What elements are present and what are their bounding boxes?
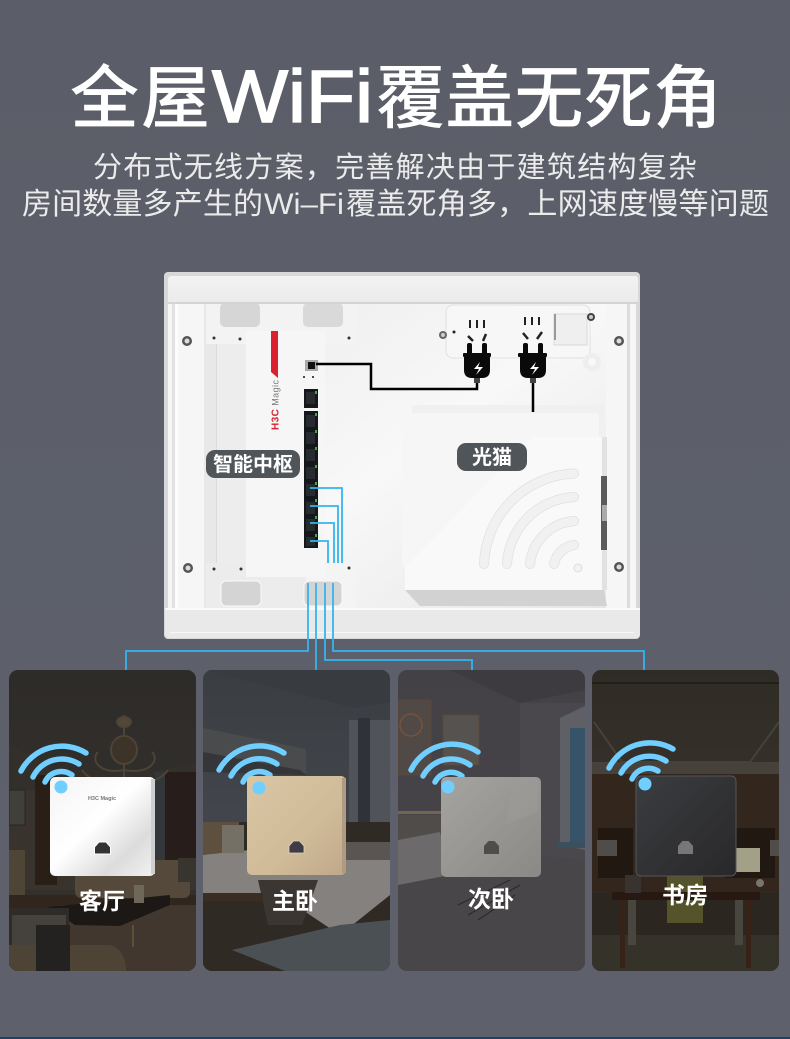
title: 全屋 (70, 42, 210, 142)
modem wifi cutouts (484, 474, 574, 564)
black power cable (316, 364, 533, 412)
room labels: 主卧 (272, 882, 318, 916)
panel: master bedroom (203, 670, 390, 971)
brand text: H3C Magic (270, 380, 282, 430)
title (70, 42, 722, 142)
port (484, 841, 499, 854)
panel: distribution box (164, 272, 640, 639)
subtitle: Wi–Fi (264, 188, 344, 221)
bottom bar (165, 608, 640, 638)
brand strip (271, 331, 278, 378)
hinge (601, 437, 607, 590)
room scene (592, 682, 779, 971)
wifi icon: study (609, 743, 673, 779)
panel: study (592, 670, 779, 971)
power strip (439, 305, 601, 371)
port (678, 841, 693, 854)
room labels: 次卧 (468, 880, 514, 914)
console port (303, 360, 318, 378)
room scene (398, 670, 585, 971)
brand: H3C Magic (88, 796, 116, 802)
room scene (9, 715, 196, 971)
bottom mounting plate (206, 563, 356, 608)
smart hub router (246, 331, 325, 577)
panel: second bedroom (398, 670, 585, 971)
label: smart hub: 智能中枢 (213, 448, 293, 477)
port (289, 841, 304, 853)
left rail (168, 302, 204, 610)
LAN ports (304, 389, 318, 548)
access point: gold (247, 776, 346, 875)
subtitle (22, 144, 769, 223)
access point: black (636, 776, 736, 876)
room labels: 客厅 (79, 882, 125, 916)
top mounting plate (206, 303, 358, 344)
icon: power plug right (518, 332, 547, 383)
room labels (79, 876, 708, 916)
title: 覆盖无死角 (376, 42, 722, 142)
label: optical modem (457, 441, 527, 471)
access point: silver (441, 777, 541, 877)
panel: living room (9, 670, 196, 971)
port (94, 842, 110, 854)
access point: white (50, 777, 155, 876)
room labels: 书房 (662, 876, 708, 910)
subtitle: 房间数量多产生的 (22, 179, 263, 223)
room scene (203, 670, 390, 971)
wifi icon: second bedroom (411, 744, 478, 782)
wifi icon: master bedroom (219, 746, 284, 782)
right rail (606, 302, 636, 610)
top bar (168, 276, 638, 304)
box interior (204, 303, 606, 608)
optical modem (402, 405, 607, 606)
icon: power plug left (463, 334, 491, 383)
label: optical modem: 光猫 (472, 441, 512, 470)
blue network cables (126, 488, 644, 670)
wifi icon: living room (21, 746, 86, 782)
signal dots (54, 778, 652, 794)
title: WiFi (212, 55, 373, 138)
subtitle: 分布式无线方案，完善解决由于建筑结构复杂 (93, 144, 697, 186)
subtitle: 覆盖死角多，上网速度慢等问题 (346, 179, 769, 223)
chandelier (82, 715, 168, 781)
